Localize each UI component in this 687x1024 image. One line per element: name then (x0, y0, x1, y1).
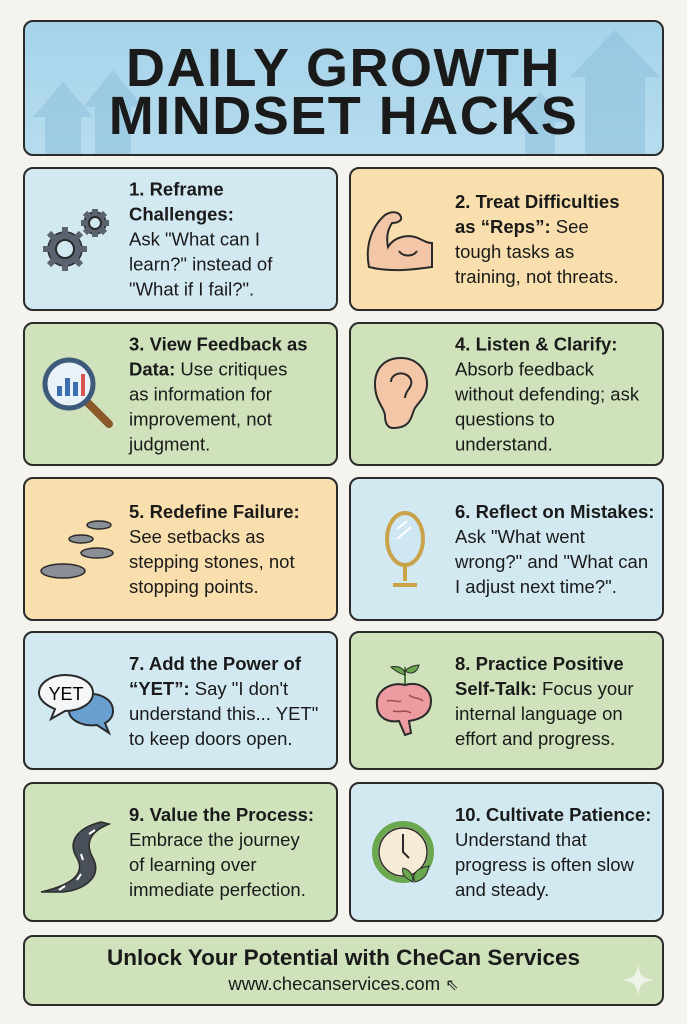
text (455, 191, 620, 287)
text: internal language on (455, 702, 623, 724)
text: training, not threats. (455, 266, 619, 287)
text: tough tasks as (455, 241, 574, 262)
card 6 (349, 477, 664, 621)
title banner (23, 20, 664, 156)
text: effort and progress. (455, 728, 615, 748)
text: understand. (455, 434, 553, 454)
text (128, 334, 308, 454)
text (455, 501, 654, 597)
title text: MINDSET HACKS (109, 86, 578, 146)
text: 3. View Feedback as (129, 334, 308, 354)
text (455, 652, 634, 749)
card 5 (23, 477, 338, 621)
text: 7. Add the Power of (129, 652, 301, 674)
text: judgment. (129, 434, 210, 454)
icon: flexed arm (366, 211, 433, 272)
text: Understand that (455, 829, 587, 850)
text (129, 178, 272, 300)
text: Ask "What went (455, 526, 585, 547)
text: understand this... YET" (129, 702, 318, 724)
text: "What if I fail?". (129, 278, 254, 300)
icon: clock with leaves (372, 821, 434, 883)
text: 2. Treat Difficulties (455, 191, 620, 212)
title text: DAILY GROWTH (126, 38, 561, 98)
text (455, 334, 640, 454)
text: See setbacks as (129, 526, 265, 547)
text: 5. Redefine Failure: (129, 501, 300, 522)
card 9 (23, 782, 338, 922)
text (129, 652, 318, 749)
card 10 (349, 782, 664, 922)
footer url with cursor icon: www.checanservices.com ⇖ (228, 972, 459, 994)
icon: YET speech bubbles (38, 674, 114, 736)
text: “YET”: Say "I don't (129, 678, 288, 698)
text: 9. Value the Process: (129, 804, 314, 825)
icon: winding road (40, 821, 112, 893)
footer banner (23, 935, 664, 1006)
text: stopping points. (129, 576, 259, 597)
text: immediate perfection. (129, 879, 306, 900)
text: as information for (129, 384, 272, 404)
text: Embrace the journey (129, 829, 300, 850)
icon: brain with sprout (376, 664, 432, 736)
text: as “Reps”: See (455, 216, 589, 237)
title text (109, 38, 578, 146)
card 3 (23, 322, 338, 466)
text: 1. Reframe (129, 178, 224, 200)
text: progress is often slow (455, 854, 634, 875)
icon: YET speech bubbles: YET (48, 684, 84, 704)
text: 10. Cultivate Patience: (455, 804, 651, 825)
text: Data: Use critiques (129, 358, 287, 380)
card 1 (23, 167, 338, 311)
icon: gears (43, 209, 109, 271)
icon: magnifier chart (42, 358, 113, 428)
text: 4. Listen & Clarify: (455, 334, 617, 354)
text: without defending; ask (455, 384, 639, 404)
text: Self-Talk: Focus your (455, 678, 634, 698)
card 8 (349, 631, 664, 770)
text: 8. Practice Positive (455, 652, 624, 674)
text (129, 804, 314, 900)
sparkle icon (622, 964, 654, 996)
text (129, 501, 300, 597)
text: questions to (455, 408, 555, 430)
text: and steady. (455, 879, 549, 900)
text: I adjust next time?". (455, 576, 617, 597)
card 4 (349, 322, 664, 466)
text: learn?" instead of (129, 254, 272, 274)
icon: ear (374, 357, 428, 429)
text: Ask "What can I (129, 228, 260, 250)
card 2 (349, 167, 664, 311)
icon: stepping stones (40, 520, 114, 579)
icon: mirror (385, 511, 425, 587)
text: stepping stones, not (129, 551, 295, 572)
text: improvement, not (129, 408, 272, 430)
text: wrong?" and "What can (455, 551, 648, 572)
text: Absorb feedback (455, 358, 594, 380)
card 7 (23, 631, 338, 770)
footer headline: Unlock Your Potential with CheCan Services (107, 944, 580, 970)
text: of learning over (129, 854, 257, 875)
text (455, 804, 651, 900)
text: 6. Reflect on Mistakes: (455, 501, 654, 522)
background arrows (33, 30, 660, 154)
text: to keep doors open. (129, 728, 293, 748)
text: Challenges: (129, 204, 234, 224)
